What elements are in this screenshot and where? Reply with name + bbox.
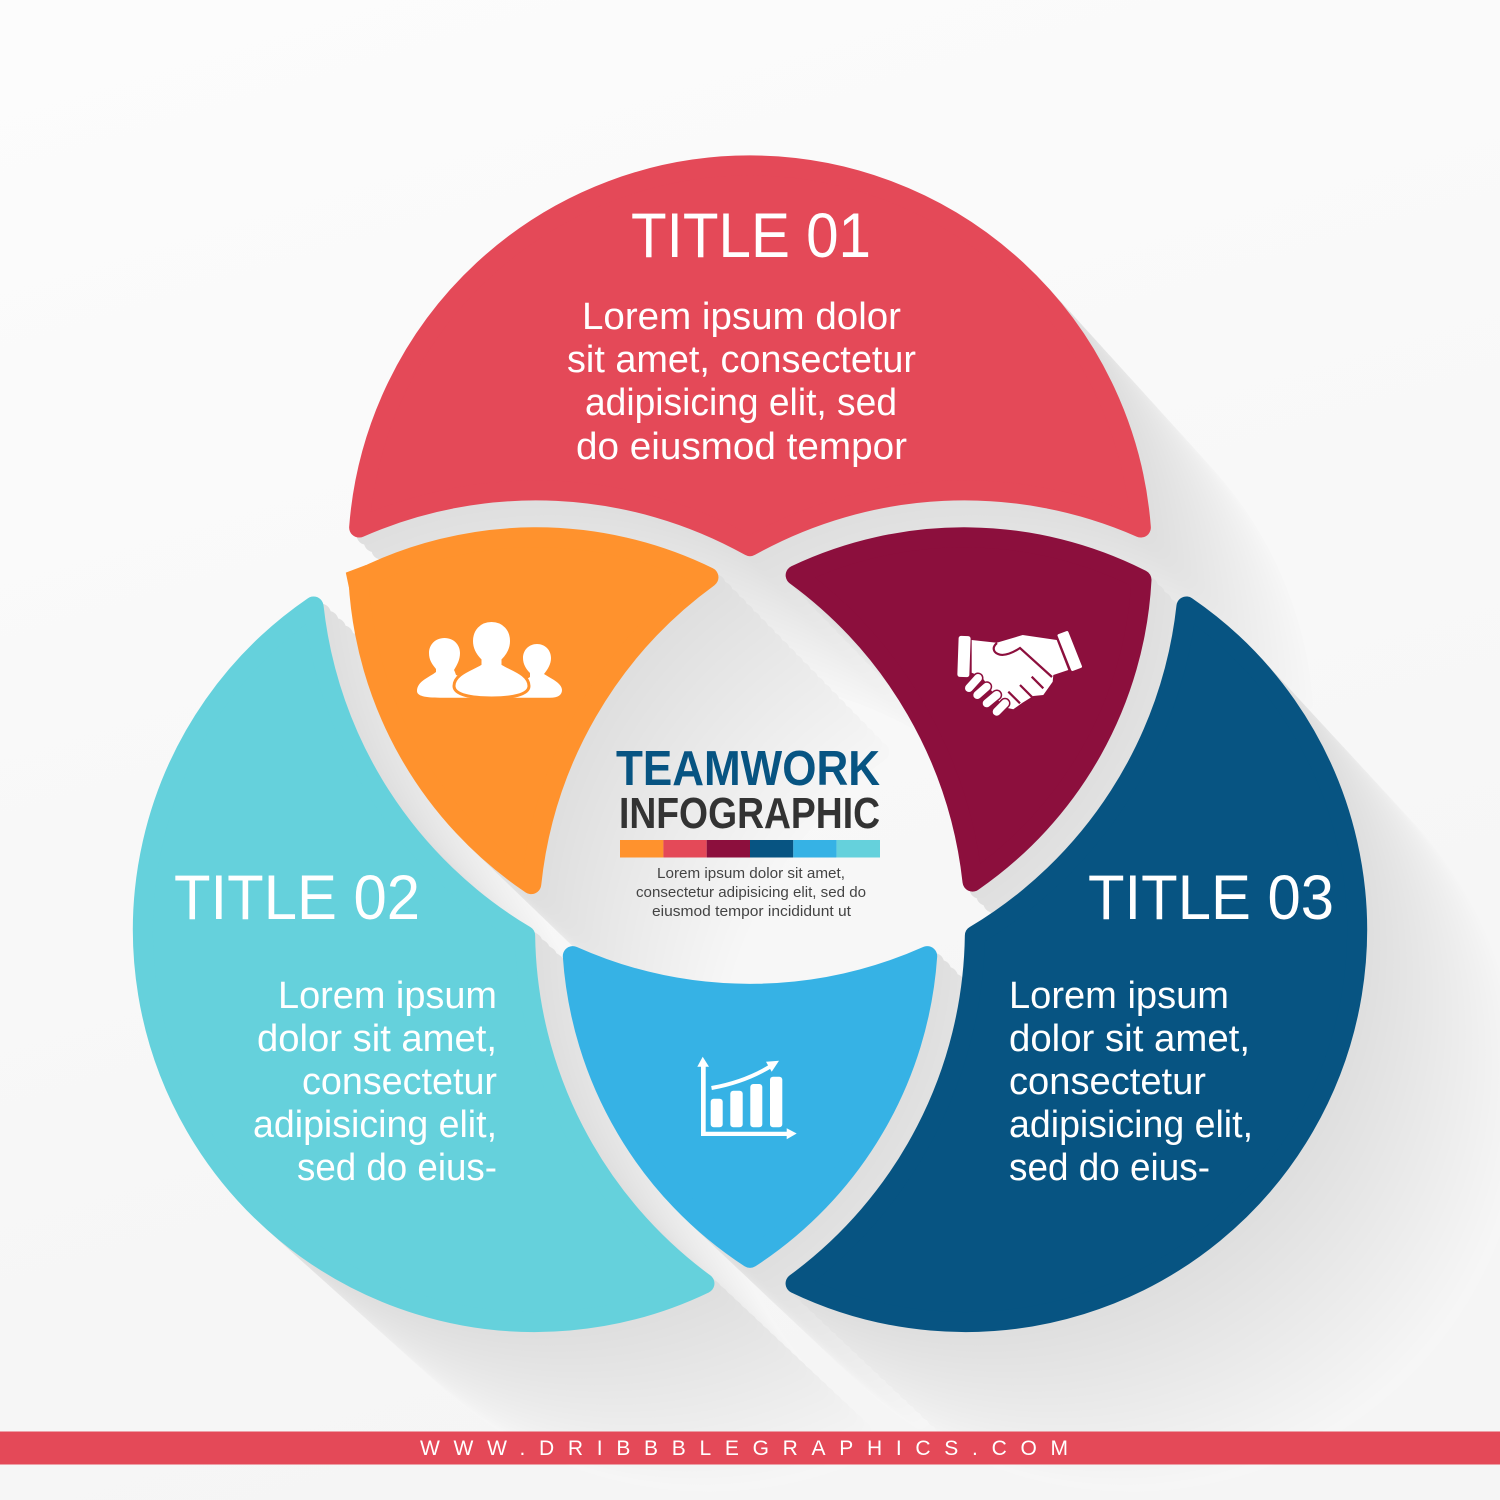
icon: handshake	[957, 632, 1080, 712]
panel: blue overlap	[573, 956, 927, 1258]
panel: orange overlap	[346, 537, 708, 884]
text block: center description: consectetur adipisicing elit, sed do	[636, 884, 866, 901]
heading: title 03: TITLE 03	[1088, 863, 1334, 933]
long shadows	[272, 294, 1466, 1432]
heading: teamwork: TEAMWORK	[616, 742, 880, 796]
text block: title 02 body: dolor sit amet,	[257, 1018, 497, 1060]
website url: WWW.DRIBBBLEGRAPHICS.COM	[420, 1437, 1068, 1460]
text block: title 03 body: consectetur	[1009, 1061, 1206, 1103]
orange segment	[358, 537, 708, 884]
icon: growth chart	[697, 1057, 797, 1139]
panel: maroon overlap	[796, 537, 1142, 882]
panel: title 03	[796, 606, 1357, 1322]
colour bar	[620, 840, 880, 858]
text block: title 02 body: consectetur	[302, 1061, 497, 1103]
text block: title 02 body	[253, 975, 497, 1189]
heading: title 01: TITLE 01	[631, 201, 871, 271]
footer banner	[0, 1432, 1500, 1464]
text block: title 03 body: dolor sit amet,	[1009, 1018, 1250, 1060]
text block: title 03 body: adipisicing elit,	[1009, 1104, 1253, 1146]
text block: title 01 body: adipisicing elit, sed	[585, 382, 897, 424]
text block: title 02 body: Lorem ipsum	[278, 975, 497, 1017]
icon: people	[417, 620, 562, 698]
maroon segment	[796, 537, 1142, 882]
text block: title 01 body: do eiusmod tempor	[576, 426, 907, 468]
center block: teamwork infographic	[616, 742, 880, 920]
navy segment	[796, 606, 1357, 1322]
orange sharp corner	[346, 565, 378, 602]
text block: title 03 body	[1009, 975, 1253, 1189]
heading: infographic: INFOGRAPHIC	[619, 789, 880, 838]
text block: center description	[636, 865, 866, 920]
heading: title 02: TITLE 02	[174, 863, 420, 933]
text block: title 01 body	[567, 296, 916, 468]
text block: title 02 body: adipisicing elit,	[253, 1104, 497, 1146]
text block: center description: Lorem ipsum dolor sit amet,	[657, 865, 845, 882]
cyan segment	[143, 606, 704, 1322]
panel: title 01	[359, 165, 1141, 546]
panel: title 02	[143, 606, 704, 1322]
text block: title 03 body: Lorem ipsum	[1009, 975, 1229, 1017]
text block: title 01 body: sit amet, consectetur	[567, 339, 916, 381]
text block: center description: eiusmod tempor incididunt ut	[652, 903, 852, 920]
text block: title 01 body: Lorem ipsum dolor	[582, 296, 901, 338]
text block: title 03 body: sed do eius-	[1009, 1147, 1210, 1189]
red segment	[359, 165, 1141, 546]
blue segment	[573, 956, 927, 1258]
text block: title 02 body: sed do eius-	[297, 1147, 497, 1189]
